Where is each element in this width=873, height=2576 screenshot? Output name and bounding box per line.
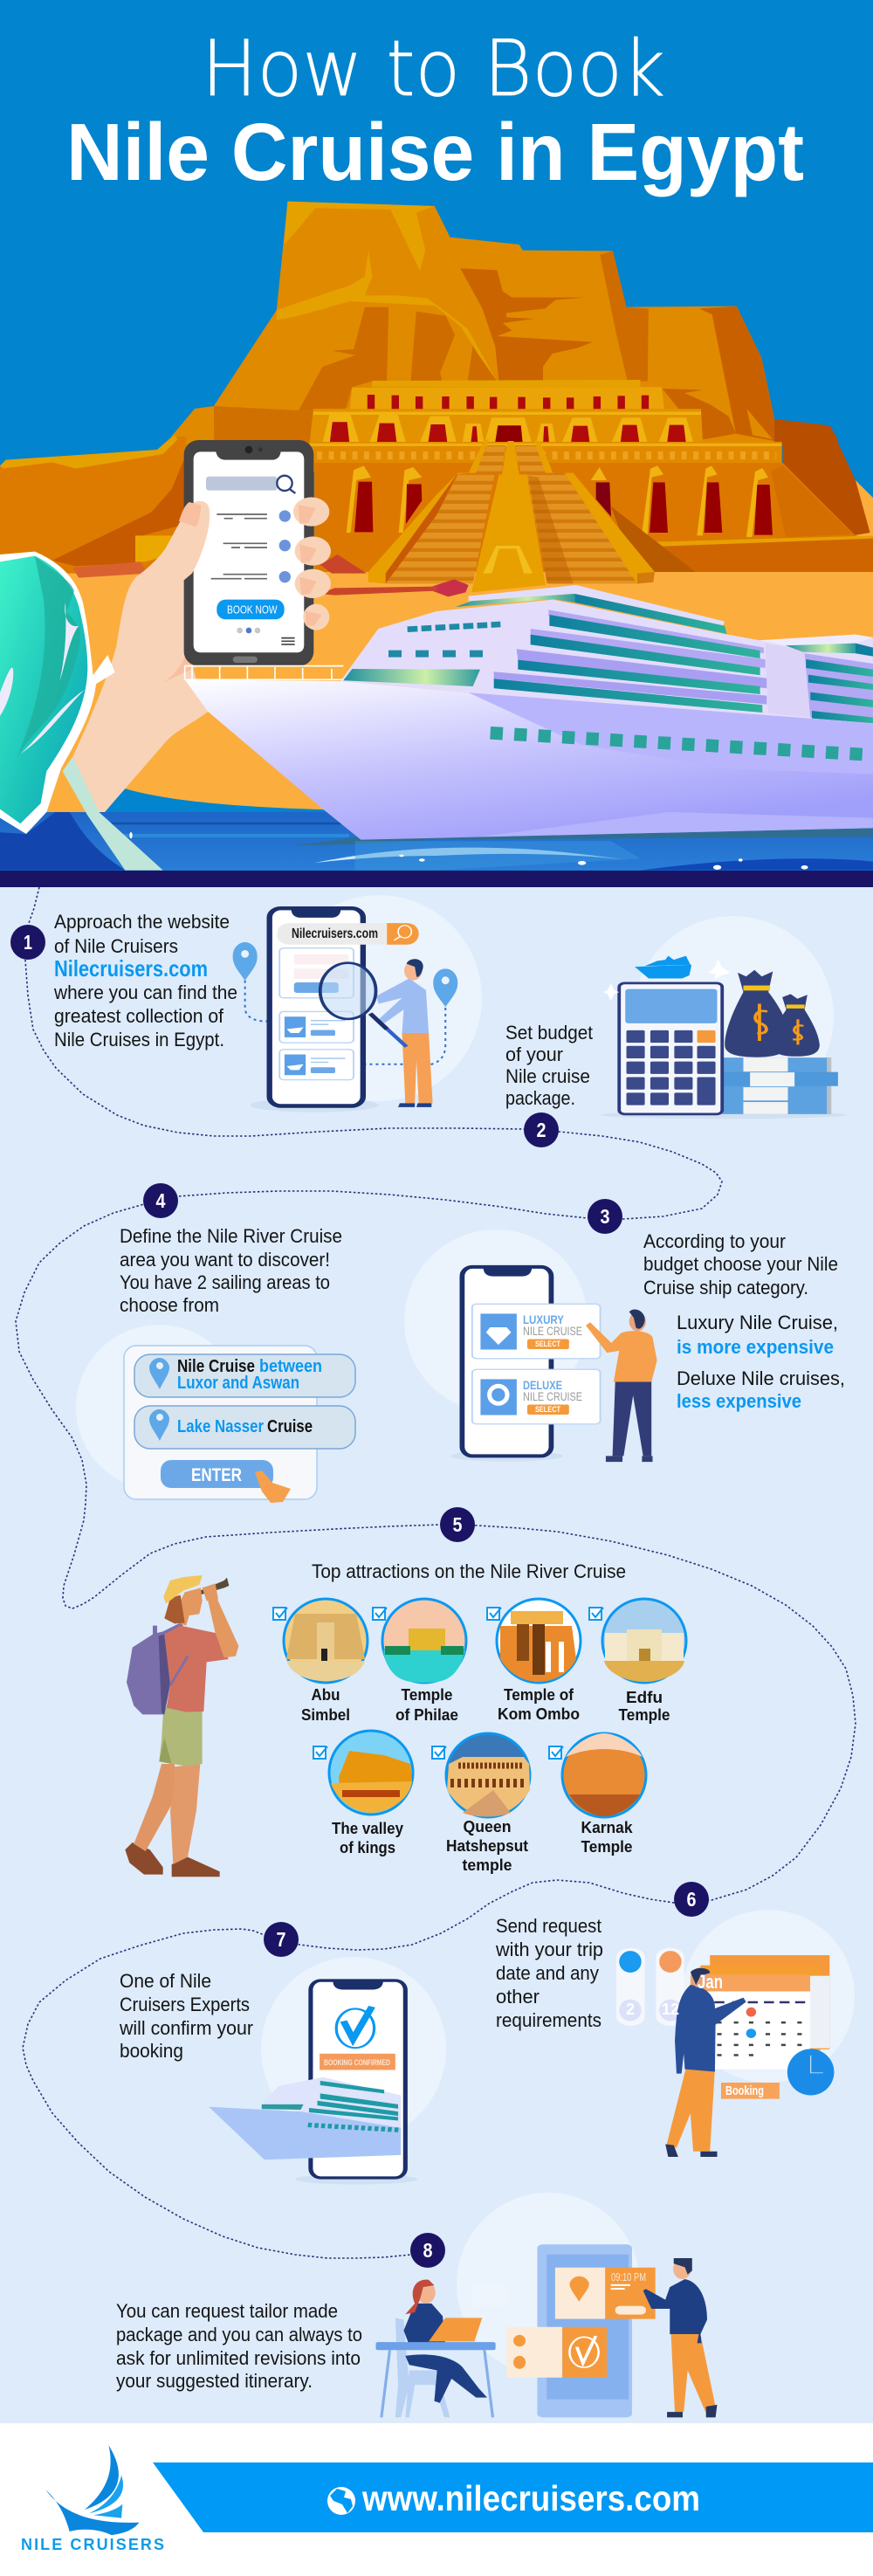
step 7 text [119, 1970, 253, 2062]
attraction: Temple of Philae: of Philae [395, 1706, 458, 1724]
step 3 illustration: ship category selection: SELECT [535, 1405, 560, 1414]
step 8 number [410, 2233, 445, 2268]
step 8 text: your suggested itinerary. [116, 2370, 313, 2392]
option: Luxor and Aswan: between [259, 1357, 322, 1376]
thumb [163, 501, 210, 588]
step 2 text [505, 1022, 593, 1109]
hand holding phone: BOOK NOW [227, 603, 278, 616]
navy band [0, 871, 873, 887]
step 2 text: Nile cruise [505, 1065, 590, 1087]
title: How to Book [202, 24, 665, 114]
step 4 text: Define the Nile River Cruise [120, 1225, 342, 1247]
attraction: Edfu Temple [589, 1599, 686, 1724]
step 6 text: other [496, 1986, 540, 2008]
booking button [721, 2083, 780, 2099]
step 3 text: Deluxe Nile cruises, [677, 1367, 845, 1389]
step 7 text: One of Nile [120, 1970, 211, 1992]
man pointing [586, 1310, 657, 1462]
attraction: Queen Hatshepsut temple: Queen [463, 1818, 512, 1836]
step 7 number [264, 1922, 299, 1957]
step 6 text [495, 1915, 603, 2031]
attraction: Abu Simbel: Simbel [301, 1706, 350, 1724]
enter button: ENTER [191, 1465, 242, 1485]
step 1 illustration: website search: Nilecruisers.com [292, 926, 378, 941]
step 7 text: Cruisers Experts [120, 1994, 250, 2015]
step 1 text: Nilecruisers.com [54, 955, 208, 981]
map pin [433, 968, 457, 1007]
pale circles [76, 895, 855, 2376]
icon: globe [327, 2487, 355, 2515]
step 3 illustration: ship category selection: SELECT [535, 1340, 560, 1348]
traveler with binoculars [125, 1575, 238, 1877]
attraction: Temple of Philae: Temple [402, 1686, 452, 1704]
logo [21, 2445, 164, 2553]
step 3 text [643, 1230, 845, 1412]
url banner [153, 2462, 873, 2532]
option: Luxor and Aswan: Nile Cruise [177, 1357, 255, 1376]
step 3 text: Cruise ship category. [643, 1277, 808, 1298]
step 6 text: requirements [496, 2009, 601, 2031]
step 8 number: 8 [423, 2239, 433, 2262]
cash stacks [722, 1057, 838, 1114]
step 8 text: You can request tailor made [116, 2300, 338, 2322]
mountain [159, 202, 838, 472]
step 3 illustration: ship category selection: LUXURY [523, 1312, 565, 1326]
attraction: Karnak Temple: Karnak [581, 1819, 633, 1836]
hero background [0, 0, 873, 871]
attraction: The valley of kings: of kings [340, 1839, 395, 1856]
step 6 number [674, 1882, 709, 1917]
attraction: Karnak Temple [549, 1733, 646, 1856]
step 1 illustration: website search [233, 908, 457, 1112]
sand [0, 480, 873, 812]
upper terraces [310, 380, 782, 472]
red rocks [432, 579, 469, 596]
step 1 text [53, 911, 237, 1050]
deck rail [185, 666, 343, 680]
step 7 text: booking [120, 2040, 183, 2062]
website address: www.nilecruisers.com [361, 2478, 700, 2518]
step 7 text: will confirm your [119, 2017, 253, 2039]
step 8 text: package and you can always to [116, 2324, 362, 2345]
step 1 text: Approach the website [54, 911, 230, 933]
cruise ship [185, 585, 873, 840]
attraction: Temple of Kom Ombo [487, 1599, 581, 1723]
sea [0, 812, 873, 871]
step 4 card: sailing areas [124, 1346, 355, 1503]
step 6 illustration: calendar booking: 12 [662, 2001, 679, 2018]
left mountain [0, 435, 186, 578]
step 6 illustration: calendar booking: Jan [698, 1971, 723, 1993]
step 2 illustration: calculator and money [601, 956, 846, 1119]
windows [347, 465, 768, 537]
step 4 number: 4 [155, 1189, 166, 1212]
temple lower court [314, 437, 873, 596]
attraction: Edfu Temple: Temple [618, 1706, 670, 1724]
dotted route [16, 887, 856, 2258]
step 6 text: date and any [496, 1962, 599, 1984]
large phone [537, 2244, 632, 2417]
step 8 text [116, 2300, 362, 2392]
step 8 illustration: itinerary revision: 09:10 PM [611, 2271, 646, 2283]
step 8 text: ask for unlimited revisions into [116, 2347, 361, 2369]
step 1 text: greatest collection of [54, 1005, 224, 1027]
step 3 text: According to your [643, 1230, 786, 1252]
option: Lake Nasser: Lake Nasser [177, 1417, 264, 1436]
attraction: The valley of kings: The valley [332, 1820, 403, 1837]
sparkles [603, 960, 731, 1001]
calendar [691, 1955, 829, 2070]
step 2 number [524, 1112, 559, 1147]
wave [0, 552, 163, 871]
attraction: Temple of Kom Ombo: Temple of [504, 1686, 574, 1704]
phone [184, 440, 313, 666]
title [66, 24, 804, 197]
attraction: Abu Simbel: Abu [311, 1686, 340, 1704]
attraction: Abu Simbel [273, 1599, 368, 1724]
map pin [233, 942, 258, 981]
step 3 text: less expensive [677, 1390, 801, 1412]
step 7 illustration: booking confirmed phone and ship [209, 1980, 417, 2184]
fingers [293, 497, 331, 630]
attraction: Edfu Temple: Edfu [626, 1689, 663, 1706]
attraction: Queen Hatshepsut temple [432, 1733, 530, 1874]
option: Luxor and Aswan: Luxor and Aswan [177, 1374, 299, 1393]
title: Nile Cruise in Egypt [66, 107, 804, 197]
step 3 number [588, 1199, 622, 1234]
calculator [619, 983, 722, 1114]
attraction: The valley of kings [313, 1731, 413, 1856]
step 1 number [10, 925, 45, 960]
step 3 number: 3 [601, 1205, 609, 1228]
step 3 text: Luxury Nile Cruise, [677, 1312, 838, 1333]
step 3 illustration: ship category selection: DELUXE [523, 1378, 562, 1392]
itinerary cards [506, 2268, 656, 2378]
icon: pointing hand [255, 1471, 291, 1503]
option: Lake Nasser: Cruise [267, 1417, 313, 1436]
step 3 illustration: ship category selection: NILE CRUISE [523, 1389, 582, 1403]
hand holding phone [72, 440, 331, 812]
enter button [161, 1460, 273, 1488]
step 5 number: 5 [452, 1513, 463, 1536]
step 7 illustration: booking confirmed phone and ship: BOOKING CONFIRMED [324, 2058, 390, 2068]
step 6 illustration: calendar booking [616, 1948, 834, 2157]
step 7 number: 7 [276, 1928, 286, 1951]
option: Luxor and Aswan [134, 1354, 355, 1397]
attraction: Temple of Philae [373, 1599, 466, 1724]
step 6 number: 6 [686, 1888, 697, 1911]
step 4 text [120, 1225, 342, 1316]
man with magnifier [320, 959, 433, 1107]
man standing [643, 2258, 717, 2417]
hull [185, 679, 873, 840]
hero illustration [0, 202, 873, 871]
step 4 text: choose from [120, 1294, 219, 1316]
step 1 text: Nile Cruises in Egypt. [54, 1029, 224, 1050]
steps background [0, 887, 873, 2423]
step 5 heading: Top attractions on the Nile River Cruise [312, 1560, 626, 1582]
attraction: Queen Hatshepsut temple: Hatshepsut [446, 1837, 528, 1855]
logo: NILE CRUISERS [21, 2536, 164, 2553]
speech bubble [472, 2285, 508, 2311]
step 4 text: You have 2 sailing areas to [120, 1271, 330, 1293]
step 1 text: where you can find the [53, 981, 237, 1003]
step 4 text: area you want to discover! [120, 1249, 330, 1271]
step 5 number [440, 1507, 475, 1542]
step 2 text: package. [505, 1087, 575, 1109]
deluxe card [472, 1369, 601, 1424]
step 2 number: 2 [536, 1119, 546, 1141]
river shore [105, 789, 327, 812]
ship [209, 2077, 401, 2159]
step 1 number: 1 [24, 931, 32, 954]
phone [311, 1980, 405, 2178]
woman at desk [376, 2280, 496, 2417]
man [665, 1967, 746, 2157]
attraction: Temple of Kom Ombo: Kom Ombo [498, 1705, 580, 1723]
step 2 text: Set budget [505, 1022, 593, 1043]
step 3 text: budget choose your Nile [643, 1253, 838, 1275]
superstructure [340, 600, 873, 723]
footer [0, 2423, 873, 2576]
stairs [526, 473, 637, 583]
step 3 illustration: ship category selection [451, 1267, 657, 1462]
step 1 text: of Nile Cruisers [54, 935, 178, 957]
ship icon [635, 956, 691, 979]
step 3 illustration: ship category selection: NILE CRUISE [523, 1324, 582, 1338]
phone [270, 908, 419, 1106]
money bags [725, 970, 820, 1057]
luxury card [472, 1304, 601, 1359]
attraction: Queen Hatshepsut temple: temple [463, 1856, 512, 1874]
step 6 illustration: calendar booking: Booking [725, 2084, 764, 2098]
attraction: Karnak Temple: Temple [581, 1838, 632, 1856]
step 6 illustration: calendar booking: 2 [626, 2001, 635, 2018]
clock [787, 2049, 834, 2095]
step 3 text: is more expensive [677, 1336, 834, 1358]
step 2 text: of your [505, 1043, 563, 1065]
step 8 illustration: itinerary revision [376, 2244, 717, 2417]
step 6 text: Send request [496, 1915, 601, 1937]
step 6 text: with your trip [495, 1939, 603, 1960]
step 4 number [143, 1183, 178, 1218]
selector pills [616, 1948, 684, 2026]
option: Lake Nasser [134, 1406, 355, 1449]
